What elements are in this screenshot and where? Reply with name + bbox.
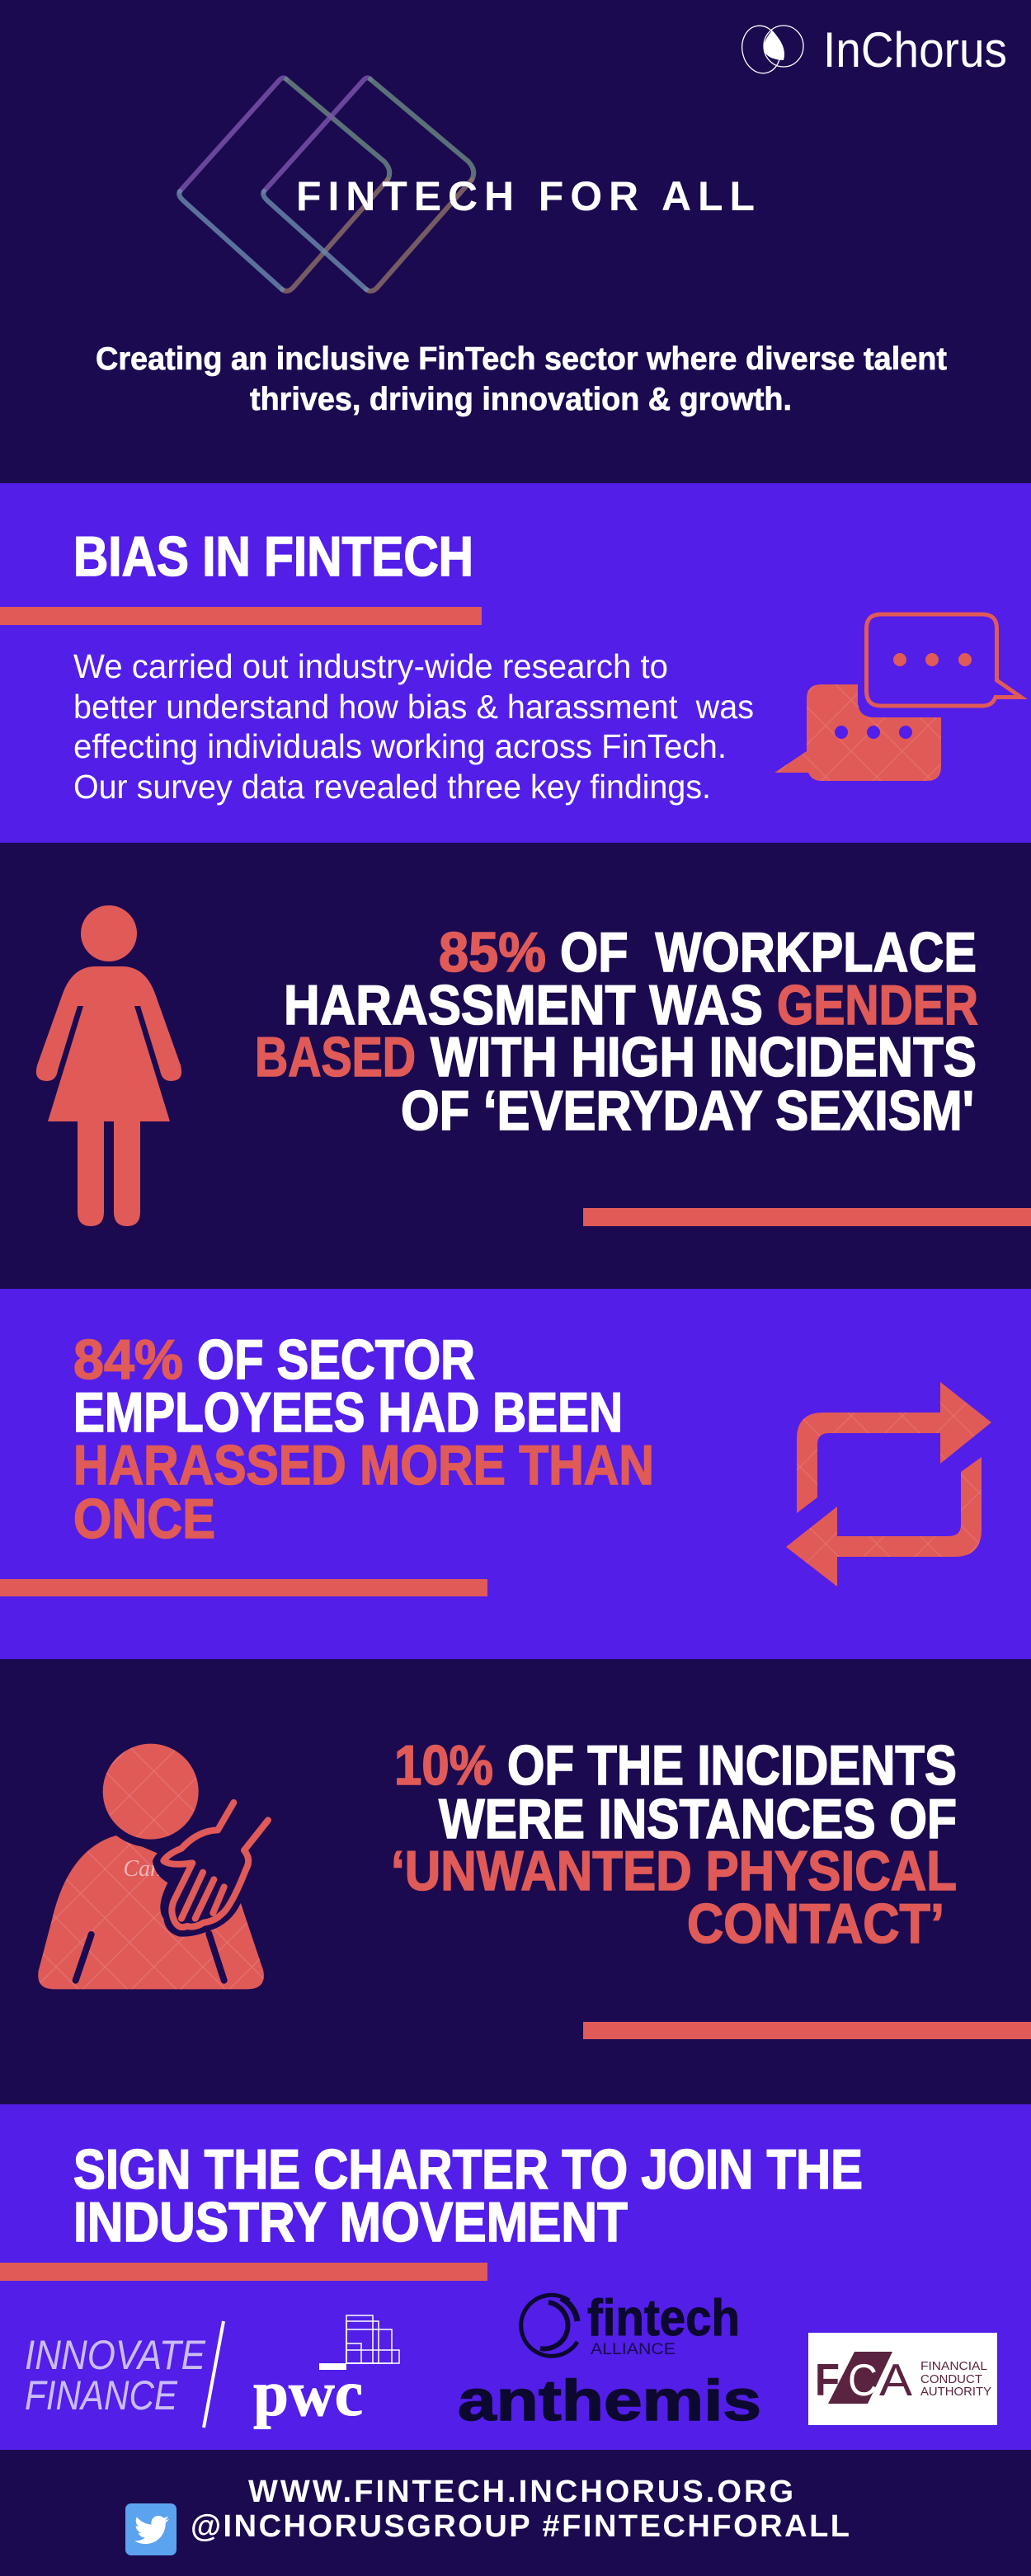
statistic text: BASED	[255, 1026, 416, 1088]
logo: Innovate Finance: FINANCE	[25, 2372, 178, 2419]
icon: person with hand on shoulder: Canva	[123, 1856, 184, 1882]
icon: person with hand on shoulder	[38, 1736, 272, 1989]
accent bar	[0, 2263, 487, 2281]
logo: FCA: A	[879, 2354, 912, 2405]
heading: SIGN THE CHARTER TO JOIN THE	[73, 2138, 863, 2201]
icon: repeat arrows	[786, 1382, 991, 1586]
accent bar	[0, 607, 482, 625]
logo: double diamond	[179, 78, 473, 291]
statistic text: GENDER	[777, 974, 978, 1037]
logo: FCA: CONDUCT	[920, 2372, 982, 2386]
website url: WWW.FINTECH.INCHORUS.ORG	[248, 2475, 793, 2509]
social handles: @INCHORUSGROUP #FINTECHFORALL	[191, 2509, 850, 2544]
statistic text: 85%	[439, 921, 546, 984]
logo: FCA: F	[815, 2354, 840, 2405]
statistic text: EMPLOYEES HAD BEEN	[73, 1381, 623, 1444]
statistic text	[391, 1734, 957, 1955]
statistic text: HARASSED MORE THAN	[73, 1434, 654, 1497]
accent bar	[583, 2022, 1031, 2039]
icon: woman	[36, 905, 181, 1226]
statistic text: ‘UNWANTED PHYSICAL	[391, 1840, 957, 1902]
logo: Innovate Finance: INNOVATE	[25, 2332, 206, 2378]
panel: sign the charter	[0, 2104, 1031, 2450]
logo: Fintech Alliance: ALLIANCE	[591, 2341, 676, 2358]
statistic text: CONTACT’	[687, 1892, 944, 1955]
text block: research intro: We carried out industry-wide research to	[73, 647, 668, 685]
panel: 85% finding	[0, 843, 1031, 1289]
statistic text: HARASSMENT WAS	[284, 974, 763, 1037]
icon: chat bubbles	[774, 614, 1021, 781]
statistic text: 84%	[73, 1328, 183, 1391]
text block: research intro: Our survey data revealed three key findings.	[73, 768, 711, 806]
logo: Fintech Alliance	[521, 2290, 740, 2358]
logo: FCA: FINANCIAL	[920, 2359, 987, 2373]
logo: PwC: pwc	[253, 2357, 363, 2429]
statistic text: OF THE INCIDENTS	[507, 1734, 957, 1797]
text block: research intro	[73, 647, 754, 806]
text block: research intro: better understand how bias & harassment was	[73, 688, 754, 726]
accent bar	[583, 1208, 1031, 1226]
panel: 84% finding	[0, 1289, 1031, 1659]
text block: research intro: effecting individuals working across FinTech.	[73, 727, 727, 765]
statistic text: WERE INSTANCES OF	[439, 1788, 957, 1850]
accent bar	[0, 1579, 487, 1596]
statistic text	[255, 921, 978, 1142]
heading	[73, 2138, 863, 2254]
icon: twitter	[125, 2503, 177, 2555]
heading: BIAS IN FINTECH	[73, 525, 473, 588]
subtitle: Creating an inclusive FinTech sector where diverse talent	[96, 341, 947, 377]
logo: Fintech Alliance: fintech	[587, 2290, 740, 2347]
statistic text: ONCE	[73, 1488, 215, 1550]
subtitle	[96, 341, 947, 417]
title: Fintech for all: FINTECH FOR ALL	[296, 173, 755, 219]
logo: FCA: C	[848, 2354, 878, 2405]
logo: PwC	[253, 2315, 399, 2429]
panel: footer	[0, 2450, 1031, 2576]
panel: bias in fintech	[0, 483, 1031, 843]
logo: FCA	[808, 2333, 997, 2425]
statistic text: 10%	[394, 1734, 493, 1797]
subtitle: thrives, driving innovation & growth.	[250, 382, 792, 417]
statistic text: WITH HIGH INCIDENTS	[431, 1026, 977, 1088]
statistic text: OF WORKPLACE	[560, 921, 977, 984]
panel: header	[0, 0, 1031, 483]
statistic text	[73, 1328, 654, 1550]
logo: InChorus	[737, 22, 1007, 78]
panel: 10% finding	[0, 1659, 1031, 2104]
logo: FCA: AUTHORITY	[920, 2385, 991, 2399]
statistic text: OF SECTOR	[197, 1328, 475, 1391]
heading: INDUSTRY MOVEMENT	[73, 2191, 628, 2254]
logo: Anthemis: anthemis	[458, 2368, 761, 2433]
logo: Innovate Finance	[25, 2321, 224, 2428]
logo: InChorus: InChorus	[823, 22, 1007, 78]
